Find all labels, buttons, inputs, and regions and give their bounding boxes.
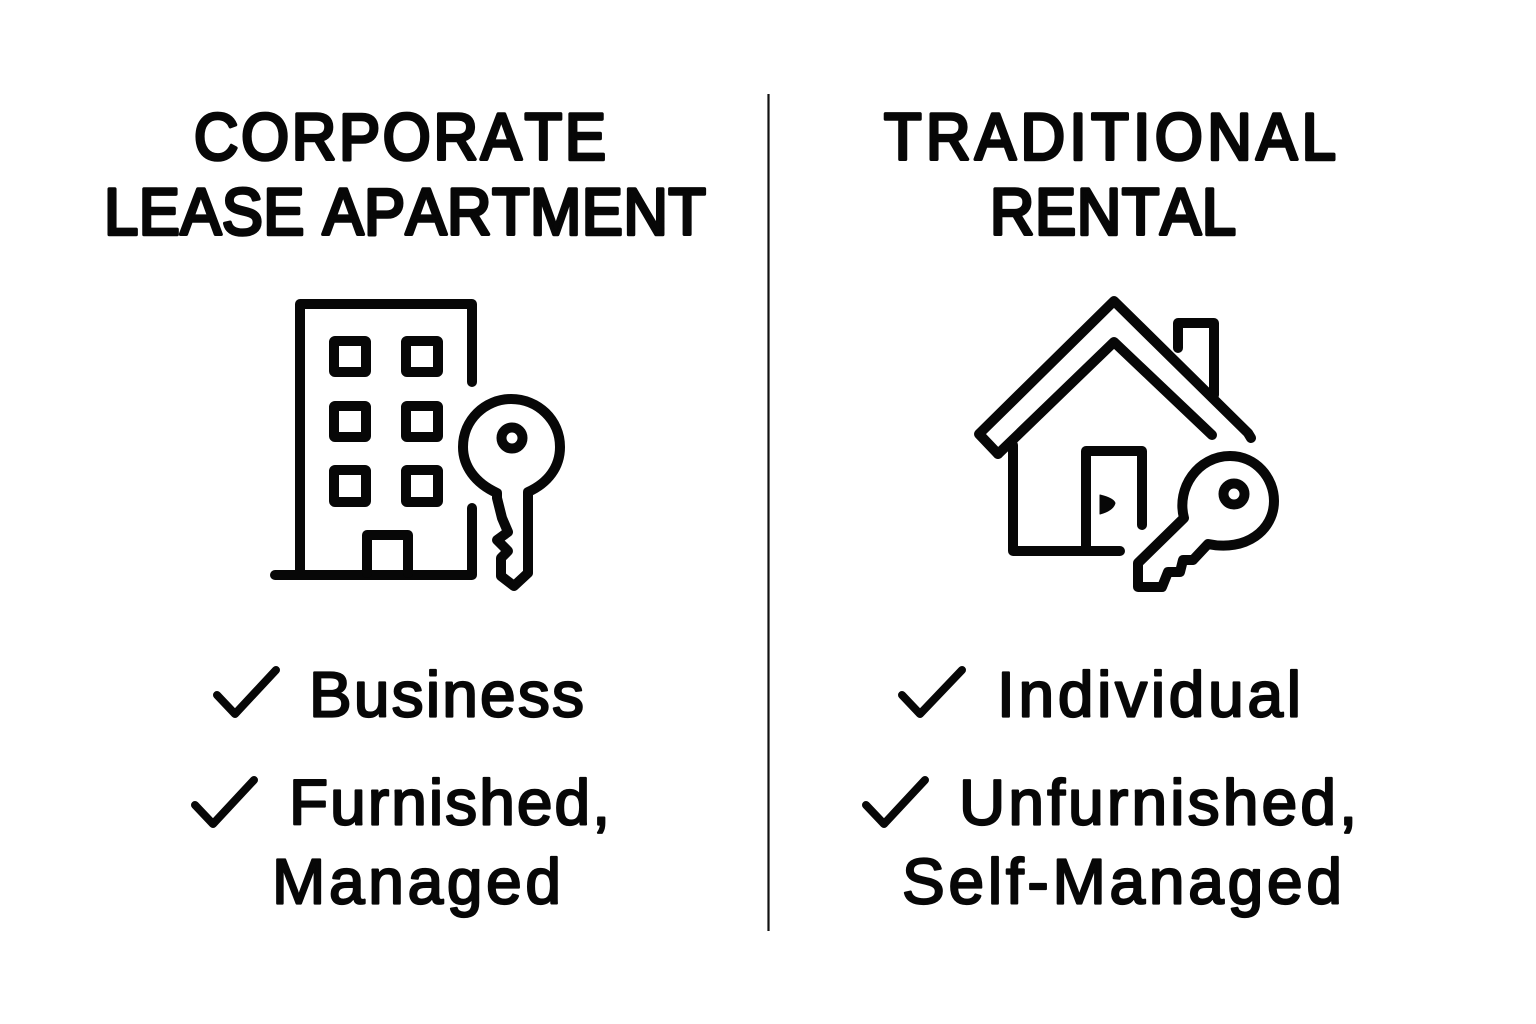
heading: corporate lease apartment: [104, 99, 706, 249]
check icon: furnished: [195, 780, 254, 824]
divider line: [767, 94, 770, 931]
check icon: business: [217, 670, 276, 714]
heading: traditional rental: [884, 99, 1336, 249]
heading: corporate lease apartment: CORPORATE: [194, 99, 606, 174]
label: unfurnished, self-managed: Self-Managed: [902, 846, 1342, 918]
label: furnished, managed: [272, 766, 610, 918]
icon: house with key: [979, 301, 1274, 587]
checklist: traditional rental: [866, 658, 1357, 918]
checklist: corporate lease: [195, 658, 610, 918]
heading: corporate lease apartment: LEASE APARTMENT: [104, 174, 706, 249]
check icon: unfurnished: [866, 780, 925, 824]
heading: traditional rental: TRADITIONAL: [884, 99, 1336, 174]
heading: traditional rental: RENTAL: [990, 174, 1236, 249]
icon: apartment building with key: [275, 304, 560, 586]
label: furnished, managed: Furnished,: [289, 766, 610, 838]
label: unfurnished, self-managed: [902, 766, 1357, 918]
check icon: individual: [902, 670, 962, 714]
label: unfurnished, self-managed: Unfurnished,: [959, 766, 1357, 838]
label: business: Business: [309, 658, 584, 730]
label: individual: Individual: [997, 658, 1301, 730]
label: furnished, managed: Managed: [272, 846, 561, 918]
